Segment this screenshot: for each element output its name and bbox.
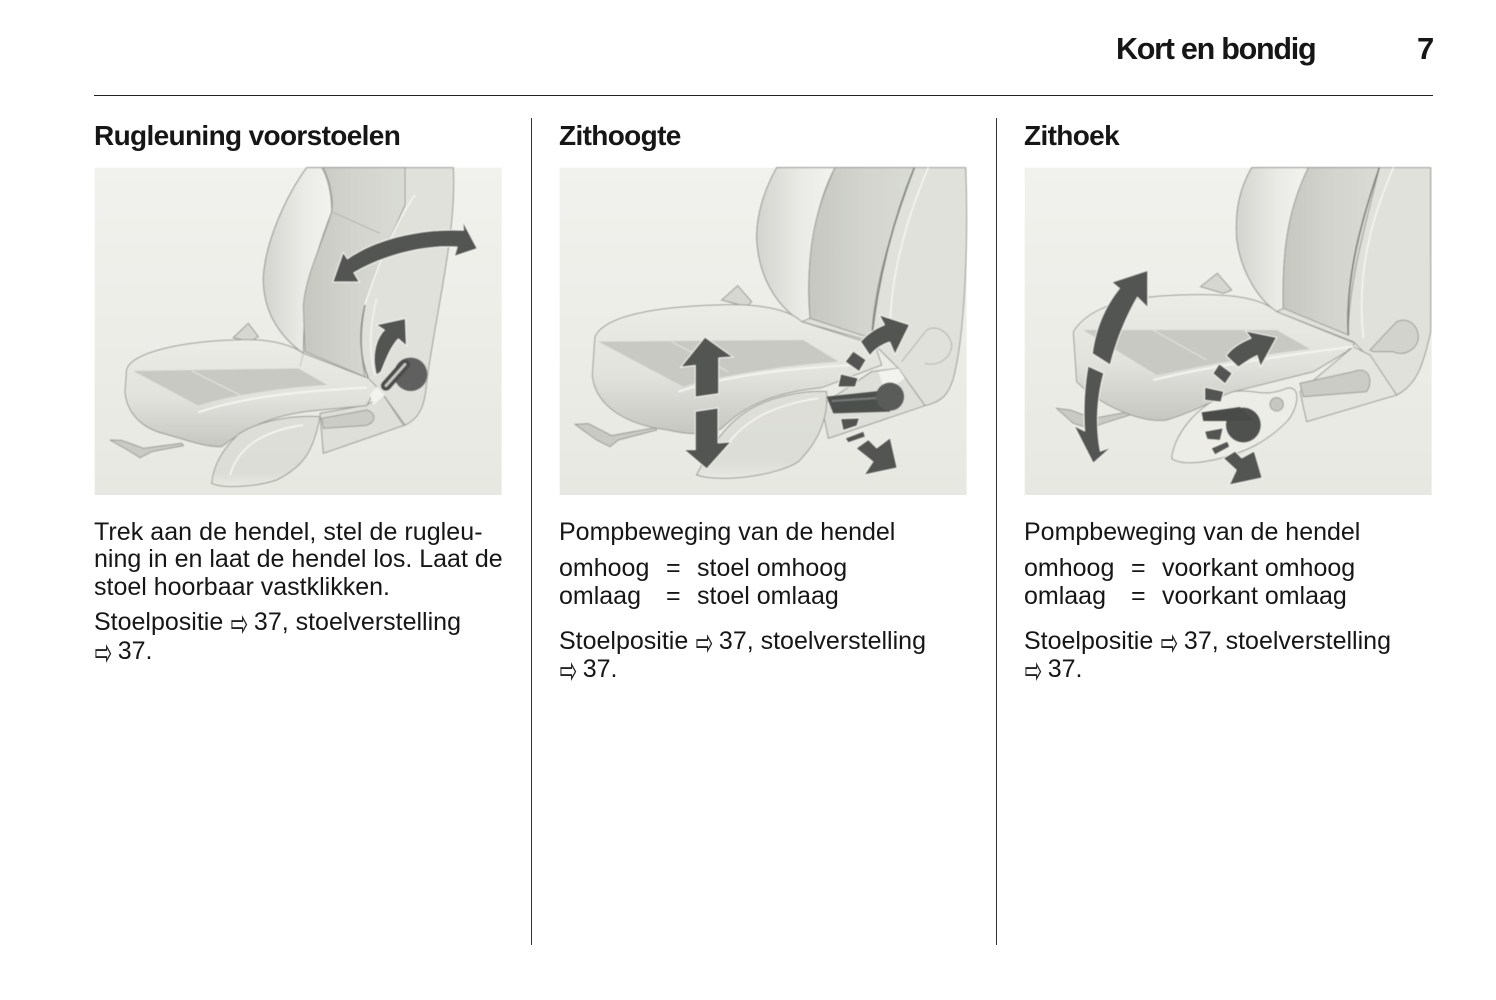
page number: 7 [1417, 31, 1434, 66]
text block: seat height instructions: = [666, 554, 681, 582]
heading: seat height: Zithoogte [559, 120, 681, 151]
text block: seat height instructions: = [666, 582, 681, 610]
text block: backrest instructions: ⇨ [231, 600, 248, 646]
text block: seat height instructions: omlaag [559, 582, 641, 610]
text block: seat tilt instructions: ⇨ [1161, 619, 1178, 665]
text block: backrest instructions [94, 518, 503, 675]
text block: seat tilt instructions: Stoelpositie 37, stoelverstelling [1024, 627, 1391, 655]
text block: seat height instructions: 37. [583, 655, 617, 683]
illustration: backrest adjustment [94, 166, 502, 495]
text block: seat tilt instructions: Pompbeweging van de hendel [1024, 518, 1360, 546]
text block: seat tilt instructions: omhoog [1024, 554, 1114, 582]
illustration: seat height adjustment [560, 166, 968, 495]
text block: seat height instructions: ⇨ [560, 647, 577, 693]
seat height lever [827, 383, 904, 413]
text block: seat tilt instructions: omlaag [1024, 582, 1106, 610]
text block: seat tilt instructions: voorkant omhoog [1162, 554, 1355, 582]
text block: backrest instructions: Stoelpositie 37, stoelverstelling [94, 608, 461, 636]
text block: seat tilt instructions: ⇨ [1025, 647, 1042, 693]
text block: seat height instructions [559, 518, 926, 693]
illustration: seat tilt adjustment [1024, 166, 1432, 495]
text block: seat tilt instructions: = [1131, 554, 1146, 582]
heading: seat tilt: Zithoek [1024, 120, 1119, 151]
heading: backrest: Rugleuning voorstoelen [94, 120, 400, 151]
text block: seat height instructions: stoel omlaag [697, 582, 839, 610]
backrest double arrow [333, 223, 477, 282]
seat tilt lever [1202, 407, 1261, 442]
lever pull arrow [375, 319, 406, 374]
text block: seat height instructions: Stoelpositie 37, stoelverstelling [559, 627, 926, 655]
text block: seat tilt instructions: 37. [1048, 655, 1082, 683]
text block: backrest instructions: ning in en laat de hendel los. Laat de [94, 545, 503, 573]
text block: backrest instructions: Trek aan de hendel, stel de rugleu- [94, 518, 483, 546]
text block: seat height instructions: ⇨ [696, 619, 713, 665]
tilt curved double arrow [1075, 271, 1147, 463]
text block: seat tilt instructions: voorkant omlaag [1162, 582, 1347, 610]
text block: backrest instructions: ⇨ [95, 629, 112, 675]
text block: seat tilt instructions [1024, 518, 1391, 693]
text block: backrest instructions: 37. [118, 637, 152, 665]
text block: seat height instructions: Pompbeweging van de hendel [559, 518, 895, 546]
pump motion dashed arrow [1205, 332, 1276, 484]
text block: seat tilt instructions: = [1131, 582, 1146, 610]
text block: seat height instructions: omhoog [559, 554, 649, 582]
up and down arrow [682, 338, 732, 468]
pump motion dashed arrow [838, 316, 909, 474]
text block: seat height instructions: stoel omhoog [697, 554, 847, 582]
page header title: Kort en bondig [1116, 32, 1315, 66]
text block: backrest instructions: stoel hoorbaar vastklikken. [94, 573, 390, 601]
recline lever [386, 358, 427, 391]
